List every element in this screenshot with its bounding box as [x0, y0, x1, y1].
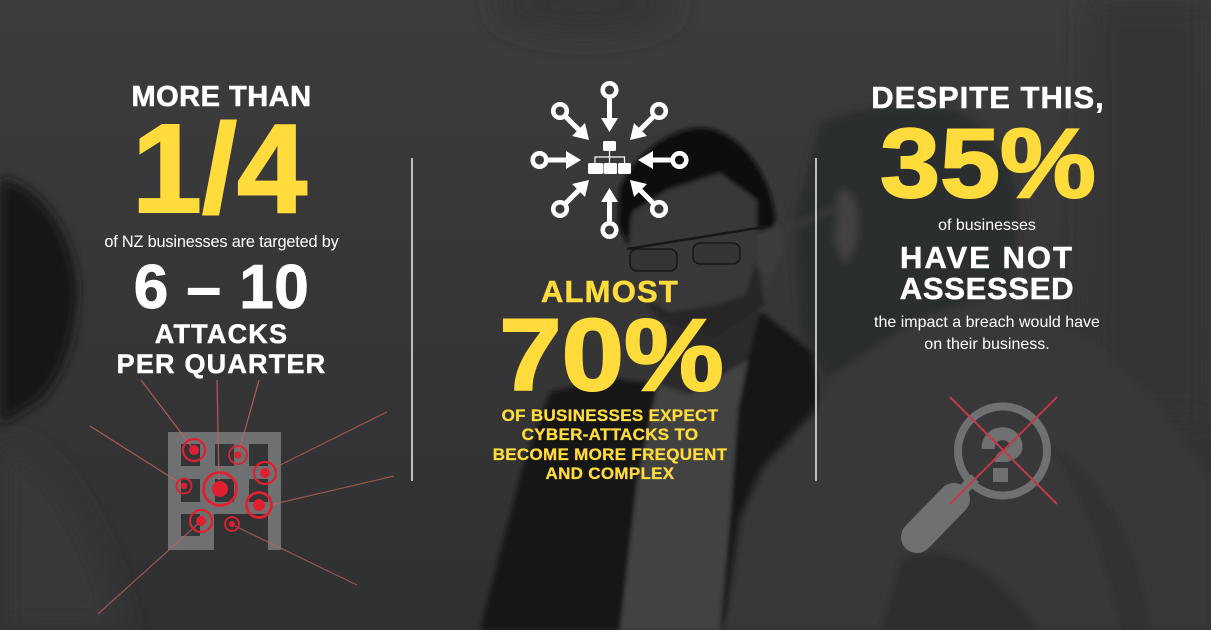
icon: network with inward arrows	[530, 81, 689, 239]
right man body	[723, 293, 1211, 630]
shirt	[620, 350, 748, 630]
left person	[0, 440, 125, 630]
text: of NZ businesses: of NZ businesses are targeted by	[104, 232, 339, 251]
heading: have not assessed	[900, 240, 1074, 306]
big number: 35%: 35%	[880, 108, 1096, 218]
big number: 6-10: 6 – 10	[134, 253, 309, 322]
text: of businesses: of businesses	[938, 217, 1036, 234]
text: businesses expect: AND COMPLEX	[546, 464, 674, 483]
big number: 70%: 70%	[499, 298, 724, 412]
heading: have not assessed: HAVE NOT	[900, 240, 1074, 275]
neck shadow	[655, 310, 760, 395]
text: businesses expect: OF BUSINESSES EXPECT	[502, 406, 718, 424]
right man head	[793, 105, 1020, 400]
heading: attacks per quarter	[117, 319, 326, 379]
icon: magnifier with question mark crossed out	[901, 396, 1058, 553]
heading: attacks per quarter: ATTACKS	[155, 319, 288, 349]
divider left	[411, 158, 412, 481]
big number: 1/4: 1/4	[132, 98, 307, 239]
text: impact of breach: on their business.	[924, 336, 1050, 353]
text: businesses expect: CYBER-ATTACKS TO	[522, 425, 698, 444]
beard	[645, 260, 765, 338]
icon: building under attack	[90, 380, 394, 614]
text: businesses expect: BECOME MORE FREQUENT	[493, 445, 727, 464]
panel: left statistic	[90, 81, 394, 614]
heading: more than: MORE THAN	[131, 81, 312, 113]
text: businesses expect	[493, 406, 727, 483]
divider right	[815, 158, 816, 481]
face	[630, 172, 782, 335]
text: impact of breach	[874, 314, 1100, 353]
hair	[618, 128, 775, 245]
heading: have not assessed: ASSESSED	[900, 271, 1074, 306]
panel: right statistic	[871, 80, 1105, 553]
heading: despite this: DESPITE THIS,	[871, 80, 1105, 115]
glasses	[627, 226, 770, 271]
panel: center statistic	[493, 81, 727, 483]
jacket	[480, 313, 820, 630]
text: impact of breach: the impact a breach would have	[874, 314, 1100, 331]
ear	[758, 225, 784, 275]
heading: almost: ALMOST	[541, 274, 679, 309]
heading: attacks per quarter: PER QUARTER	[117, 349, 326, 379]
